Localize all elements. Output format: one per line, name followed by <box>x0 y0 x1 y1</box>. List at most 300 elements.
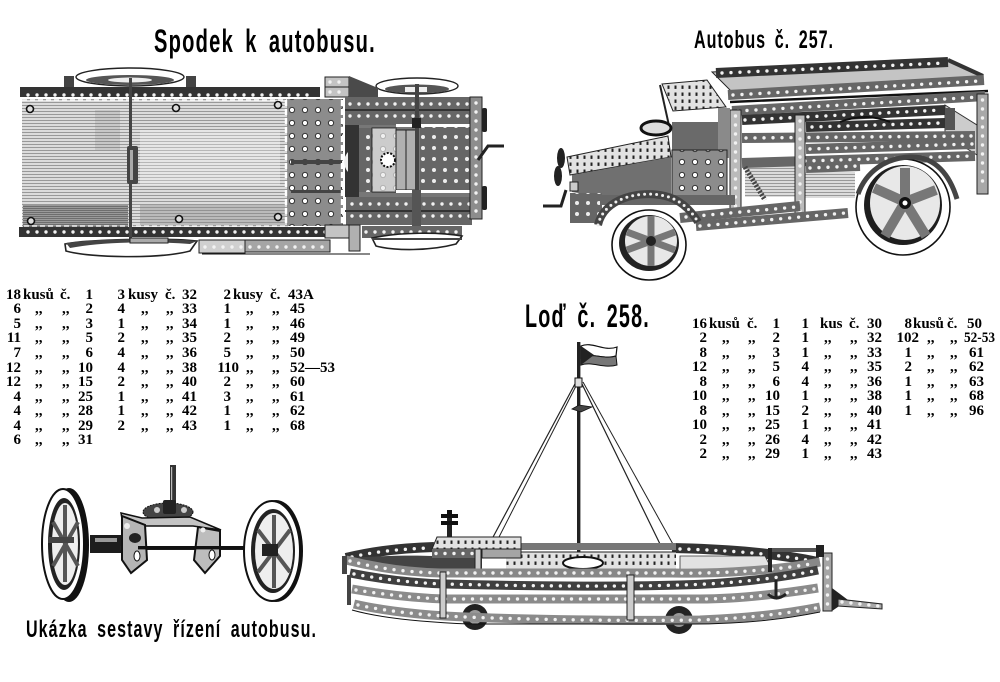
column 1: 5 <box>772 359 780 375</box>
column 2: ,, <box>824 359 832 375</box>
column 3 <box>217 287 335 434</box>
rear rim <box>346 543 818 573</box>
column 1: ,, <box>62 432 70 448</box>
column 3: 60 <box>290 374 305 390</box>
column 1: 16 <box>692 316 708 332</box>
column 2: 4 <box>802 432 810 448</box>
bottom plates <box>199 225 370 254</box>
column 2: 2 <box>118 330 125 346</box>
column 1: 8 <box>700 345 707 361</box>
column 2: ,, <box>141 389 149 405</box>
column 2: 4 <box>118 360 126 376</box>
bottom rail <box>19 226 356 232</box>
front frame strips <box>570 193 800 223</box>
column 3: ,, <box>246 374 254 390</box>
column 1: ,, <box>35 374 43 390</box>
column 1: č. <box>747 316 758 332</box>
column 3: 62 <box>969 359 984 375</box>
column 3: ,, <box>950 403 958 419</box>
column 3: ,, <box>272 389 280 405</box>
column 1: 11 <box>7 330 21 346</box>
column 3: 102 <box>896 330 919 346</box>
long running board <box>696 213 848 226</box>
hull ties <box>342 556 634 620</box>
column 3 <box>896 316 995 419</box>
column 3: 46 <box>290 316 306 332</box>
column 1: kusů <box>709 316 740 332</box>
column 1: ,, <box>722 345 730 361</box>
column 2: 4 <box>118 345 126 361</box>
column 2: ,, <box>166 360 174 376</box>
illustration: bus chassis from below <box>19 68 504 257</box>
column 2: ,, <box>166 418 174 434</box>
column 2: ,, <box>850 330 858 346</box>
column 1: 29 <box>765 446 780 462</box>
column 2: ,, <box>850 388 858 404</box>
column 3: ,, <box>927 388 935 404</box>
column 1: ,, <box>35 301 43 317</box>
bowsprit <box>832 588 882 611</box>
column 3: kusů <box>913 316 944 332</box>
column 2: kusy <box>128 287 159 303</box>
column 3: 63 <box>969 374 984 390</box>
parts list: Autobus 257 <box>692 316 995 462</box>
column 3: ,, <box>246 389 254 405</box>
column 3: 2 <box>224 374 231 390</box>
column 2: 1 <box>802 330 809 346</box>
column 2: ,, <box>824 330 832 346</box>
column 2: 2 <box>118 374 125 390</box>
column 3: 2 <box>904 359 912 375</box>
column 2: ,, <box>850 417 858 433</box>
column 3: ,, <box>246 345 254 361</box>
column 1: ,, <box>62 330 70 346</box>
column 2: ,, <box>850 446 858 462</box>
column 3: 61 <box>969 345 984 361</box>
column 2: ,, <box>166 301 174 317</box>
column 1: 6 <box>772 374 780 390</box>
column 1: ,, <box>722 417 730 433</box>
column 3: ,, <box>272 418 280 434</box>
column 3: 1 <box>224 403 231 419</box>
column 3: ,, <box>272 316 280 332</box>
column 1 <box>6 287 94 448</box>
column 1: ,, <box>748 374 756 390</box>
column 2: 35 <box>867 359 882 375</box>
column 2: 35 <box>182 330 197 346</box>
column 2 <box>118 287 198 434</box>
upper brackets <box>325 76 378 97</box>
top right wheel <box>376 78 458 94</box>
rear wheel <box>856 159 950 255</box>
column 1: ,, <box>722 330 730 346</box>
column 2: 1 <box>802 417 809 433</box>
column 2: 33 <box>182 301 197 317</box>
column 1: kusů <box>23 287 54 303</box>
column 1 <box>692 316 780 462</box>
column 1: 4 <box>14 389 22 405</box>
left bracket <box>122 516 147 573</box>
bottom left wheel <box>65 238 197 257</box>
right wheel <box>244 500 303 602</box>
column 3: ,, <box>927 330 935 346</box>
column 1: ,, <box>722 388 730 404</box>
column 2: ,, <box>824 432 832 448</box>
column 1: 3 <box>772 345 780 361</box>
column 1: 10 <box>78 360 93 376</box>
column 2: 43 <box>867 446 882 462</box>
heading: Spodek k autobusu: Spodek k autobusu. <box>154 23 376 59</box>
column 2: ,, <box>824 403 832 419</box>
column 3: 61 <box>290 389 305 405</box>
column 3: 50 <box>290 345 305 361</box>
column 3: ,, <box>272 301 280 317</box>
column 1: 31 <box>78 432 93 448</box>
column 1: ,, <box>722 432 730 448</box>
column 2: ,, <box>850 345 858 361</box>
bottom right wheel <box>362 226 462 250</box>
vent funnel <box>441 510 458 538</box>
column 3: 68 <box>290 418 305 434</box>
deck <box>506 552 676 569</box>
illustration: steering assembly <box>42 465 303 602</box>
column 3: 8 <box>904 316 912 332</box>
column 1: 10 <box>692 417 707 433</box>
rear seat rails in background <box>745 105 985 198</box>
cab roof <box>662 80 726 111</box>
column 1: ,, <box>748 359 756 375</box>
column 3: 2 <box>224 330 231 346</box>
upper body strip <box>732 96 985 111</box>
anchor <box>768 580 786 598</box>
column 3: ,, <box>950 388 958 404</box>
column 2: 30 <box>867 316 882 332</box>
column 3: ,, <box>950 359 958 375</box>
column 2: 36 <box>867 374 882 390</box>
column 2: 2 <box>118 418 125 434</box>
column 2: ,, <box>141 301 149 317</box>
column 1: ,, <box>62 301 70 317</box>
column 1: ,, <box>62 345 70 361</box>
column 1: 4 <box>14 418 22 434</box>
steering gear box <box>344 124 472 197</box>
column 1: 18 <box>6 287 21 303</box>
flag <box>581 345 617 366</box>
column 1: 2 <box>772 330 780 346</box>
engine shadow area <box>572 157 671 200</box>
steering wheel <box>641 85 671 135</box>
column 2: 4 <box>802 374 810 390</box>
column 1: ,, <box>748 432 756 448</box>
column 1: ,, <box>748 417 756 433</box>
column 1: 26 <box>765 432 780 448</box>
column 3: ,, <box>246 360 254 376</box>
column 2: 3 <box>118 287 125 303</box>
column 1: ,, <box>35 360 43 376</box>
column 1: ,, <box>35 316 43 332</box>
column 1: 6 <box>86 345 94 361</box>
rear fender <box>858 157 957 199</box>
heading: Autobus č. 257: Autobus č. 257. <box>694 26 834 54</box>
column 1: 8 <box>700 403 707 419</box>
illustration: Autobus 257 <box>543 60 988 280</box>
column 3: 62 <box>290 403 305 419</box>
mast <box>577 342 580 564</box>
crank handle <box>543 190 566 206</box>
column 2: 40 <box>182 374 197 390</box>
floor plate <box>22 99 288 227</box>
column 1: 4 <box>14 403 22 419</box>
column 1: 15 <box>78 374 93 390</box>
rear axle with bush <box>127 78 138 242</box>
column 3: 1 <box>904 345 912 361</box>
axle shaft and tube <box>90 535 265 553</box>
column 2: ,, <box>824 446 832 462</box>
column 2: 36 <box>182 345 198 361</box>
column 1: 12 <box>692 359 707 375</box>
column 2: kus <box>820 316 843 332</box>
front cross strip <box>470 97 487 219</box>
column 3: 45 <box>290 301 305 317</box>
column 3: ,, <box>927 403 935 419</box>
rear post <box>977 94 988 194</box>
column 1: ,, <box>35 330 43 346</box>
column 1: 28 <box>78 403 93 419</box>
heading: Loď č. 258: Loď č. 258. <box>525 298 650 334</box>
column 2: ,, <box>166 330 174 346</box>
column 1: ,, <box>722 374 730 390</box>
column 3: ,, <box>272 345 280 361</box>
bow post <box>768 545 832 611</box>
column 1: ,, <box>748 330 756 346</box>
column 3: ,, <box>927 359 935 375</box>
column 2: ,, <box>824 388 832 404</box>
column 2: ,, <box>141 345 149 361</box>
column 1: 10 <box>692 388 707 404</box>
column 2: ,, <box>141 330 149 346</box>
column 3: ,, <box>272 374 280 390</box>
column 2: ,, <box>166 403 174 419</box>
column 1: 7 <box>14 345 22 361</box>
parts list: Spodek k autobusu <box>6 287 335 448</box>
column 3: 96 <box>969 403 984 419</box>
column 2: ,, <box>166 316 174 332</box>
hull strip 1 <box>346 560 820 573</box>
column 2: ,, <box>141 418 149 434</box>
column 2: 1 <box>802 316 809 332</box>
column 1: 2 <box>700 432 707 448</box>
mast fittings <box>572 378 592 412</box>
column 3: ,, <box>246 301 254 317</box>
column 1: ,, <box>722 446 730 462</box>
stays <box>492 382 674 546</box>
column 1: 25 <box>78 389 93 405</box>
column 2: ,, <box>166 374 174 390</box>
column 1: 1 <box>772 316 780 332</box>
column 2: 38 <box>182 360 197 376</box>
column 2: 1 <box>118 389 125 405</box>
column 1: ,, <box>35 432 43 448</box>
column 2: ,, <box>824 374 832 390</box>
hull strip 3 <box>352 588 818 599</box>
column 1: 12 <box>6 374 21 390</box>
column 1: ,, <box>62 360 70 376</box>
column 3: 5 <box>224 345 231 361</box>
column 2: ,, <box>141 360 149 376</box>
column 3: 3 <box>224 389 231 405</box>
column 2: 32 <box>867 330 882 346</box>
column 3: ,, <box>272 403 280 419</box>
column 2: 1 <box>802 388 809 404</box>
column 1: č. <box>60 287 71 303</box>
column 1: 10 <box>765 388 780 404</box>
right frame strips <box>345 97 472 225</box>
column 1: 15 <box>765 403 780 419</box>
column 2: 42 <box>867 432 882 448</box>
column 3: ,, <box>246 418 254 434</box>
column 3: ,, <box>950 330 958 346</box>
front fender <box>598 194 698 225</box>
column 2: 1 <box>802 446 809 462</box>
caption: steering assembly: Ukázka sestavy řízení autobusu. <box>26 616 317 643</box>
roof tray <box>712 60 988 102</box>
column 1: ,, <box>722 359 730 375</box>
gear wheel <box>143 503 193 521</box>
column 1: ,, <box>748 446 756 462</box>
column 1: 2 <box>700 446 707 462</box>
column 3: 1 <box>904 374 912 390</box>
column 3: ,, <box>950 345 958 361</box>
column 2: 1 <box>118 403 125 419</box>
column 2: ,, <box>141 403 149 419</box>
column 2: č. <box>849 316 860 332</box>
column 3: č. <box>947 316 958 332</box>
illustration: Loď 258 <box>342 342 882 634</box>
column 1: 29 <box>78 418 93 434</box>
body side strips <box>742 108 975 168</box>
column 1: 12 <box>6 360 21 376</box>
column 3: ,, <box>950 374 958 390</box>
column 3: ,, <box>927 345 935 361</box>
column 2: ,, <box>141 316 149 332</box>
column 2 <box>802 316 882 462</box>
column 3: 50 <box>967 316 982 332</box>
front wheel <box>612 210 686 280</box>
column 2: ,, <box>824 345 832 361</box>
column 3: 1 <box>224 316 231 332</box>
column 1: ,, <box>748 345 756 361</box>
column 2: ,, <box>824 417 832 433</box>
hull strip 2 <box>350 570 818 586</box>
column 3: 1 <box>904 388 912 404</box>
column 1: 2 <box>86 301 93 317</box>
front axle <box>412 84 421 250</box>
middle perforated plate <box>286 99 343 226</box>
column 1: ,, <box>748 388 756 404</box>
column 2: 34 <box>182 316 198 332</box>
column 1: 25 <box>765 417 780 433</box>
column 1: 3 <box>86 316 93 332</box>
column 2: 2 <box>802 403 809 419</box>
column 3: 110 <box>217 360 239 376</box>
column 3: ,, <box>272 330 280 346</box>
crank handle <box>478 146 504 160</box>
column 2: ,, <box>166 389 174 405</box>
column 2: 33 <box>867 345 882 361</box>
axle front section <box>138 546 263 549</box>
column 2: 41 <box>182 389 197 405</box>
column 1: 6 <box>14 301 22 317</box>
column 1: ,, <box>62 403 70 419</box>
column 3: 49 <box>290 330 305 346</box>
column 2: 1 <box>802 345 809 361</box>
column 1: 8 <box>700 374 707 390</box>
column 2: ,, <box>850 374 858 390</box>
column 1: 1 <box>86 287 93 303</box>
upper body strip holes <box>738 97 980 111</box>
deck hatch dome <box>563 557 603 569</box>
column 3: ,, <box>927 374 935 390</box>
column 3: 68 <box>969 388 984 404</box>
column 1: ,, <box>62 389 70 405</box>
column 1: ,, <box>35 418 43 434</box>
column 3: 2 <box>224 287 231 303</box>
wheels under hull <box>462 604 693 634</box>
column 3: 1 <box>904 403 912 419</box>
hood <box>567 136 671 175</box>
column 3: ,, <box>246 403 254 419</box>
left wheel <box>42 488 89 602</box>
top left wheel <box>64 68 196 88</box>
column 1: ,, <box>748 403 756 419</box>
column 1: ,, <box>35 345 43 361</box>
column 2: č. <box>165 287 176 303</box>
cab side <box>672 108 730 202</box>
column 3: kusy <box>233 287 264 303</box>
radiator discs <box>554 148 578 191</box>
column 1: 5 <box>14 316 21 332</box>
column 2: 42 <box>182 403 197 419</box>
column 1: 5 <box>86 330 93 346</box>
column 3: č. <box>270 287 281 303</box>
column 2: 32 <box>182 287 197 303</box>
column 3: 43A <box>288 287 314 303</box>
column 3: ,, <box>272 360 280 376</box>
right bracket <box>194 527 220 573</box>
hull strip 4 <box>352 604 820 624</box>
column 1: 2 <box>700 330 707 346</box>
column 2: ,, <box>850 359 858 375</box>
column 3: ,, <box>246 316 254 332</box>
column 1: ,, <box>35 389 43 405</box>
column 3: 52—53 <box>290 360 335 376</box>
column 2: 43 <box>182 418 197 434</box>
column 2: 38 <box>867 388 882 404</box>
column 1: 6 <box>14 432 22 448</box>
column 3: 52-53 <box>964 330 995 346</box>
column 2: ,, <box>166 345 174 361</box>
column 2: ,, <box>141 374 149 390</box>
door posts <box>730 110 805 215</box>
steering column <box>163 465 176 514</box>
column 3: 1 <box>224 418 231 434</box>
column 1: ,, <box>35 403 43 419</box>
column 2: 41 <box>867 417 882 433</box>
cabin <box>432 537 521 573</box>
column 2: 40 <box>867 403 882 419</box>
column 3: ,, <box>246 330 254 346</box>
column 1: ,, <box>62 374 70 390</box>
